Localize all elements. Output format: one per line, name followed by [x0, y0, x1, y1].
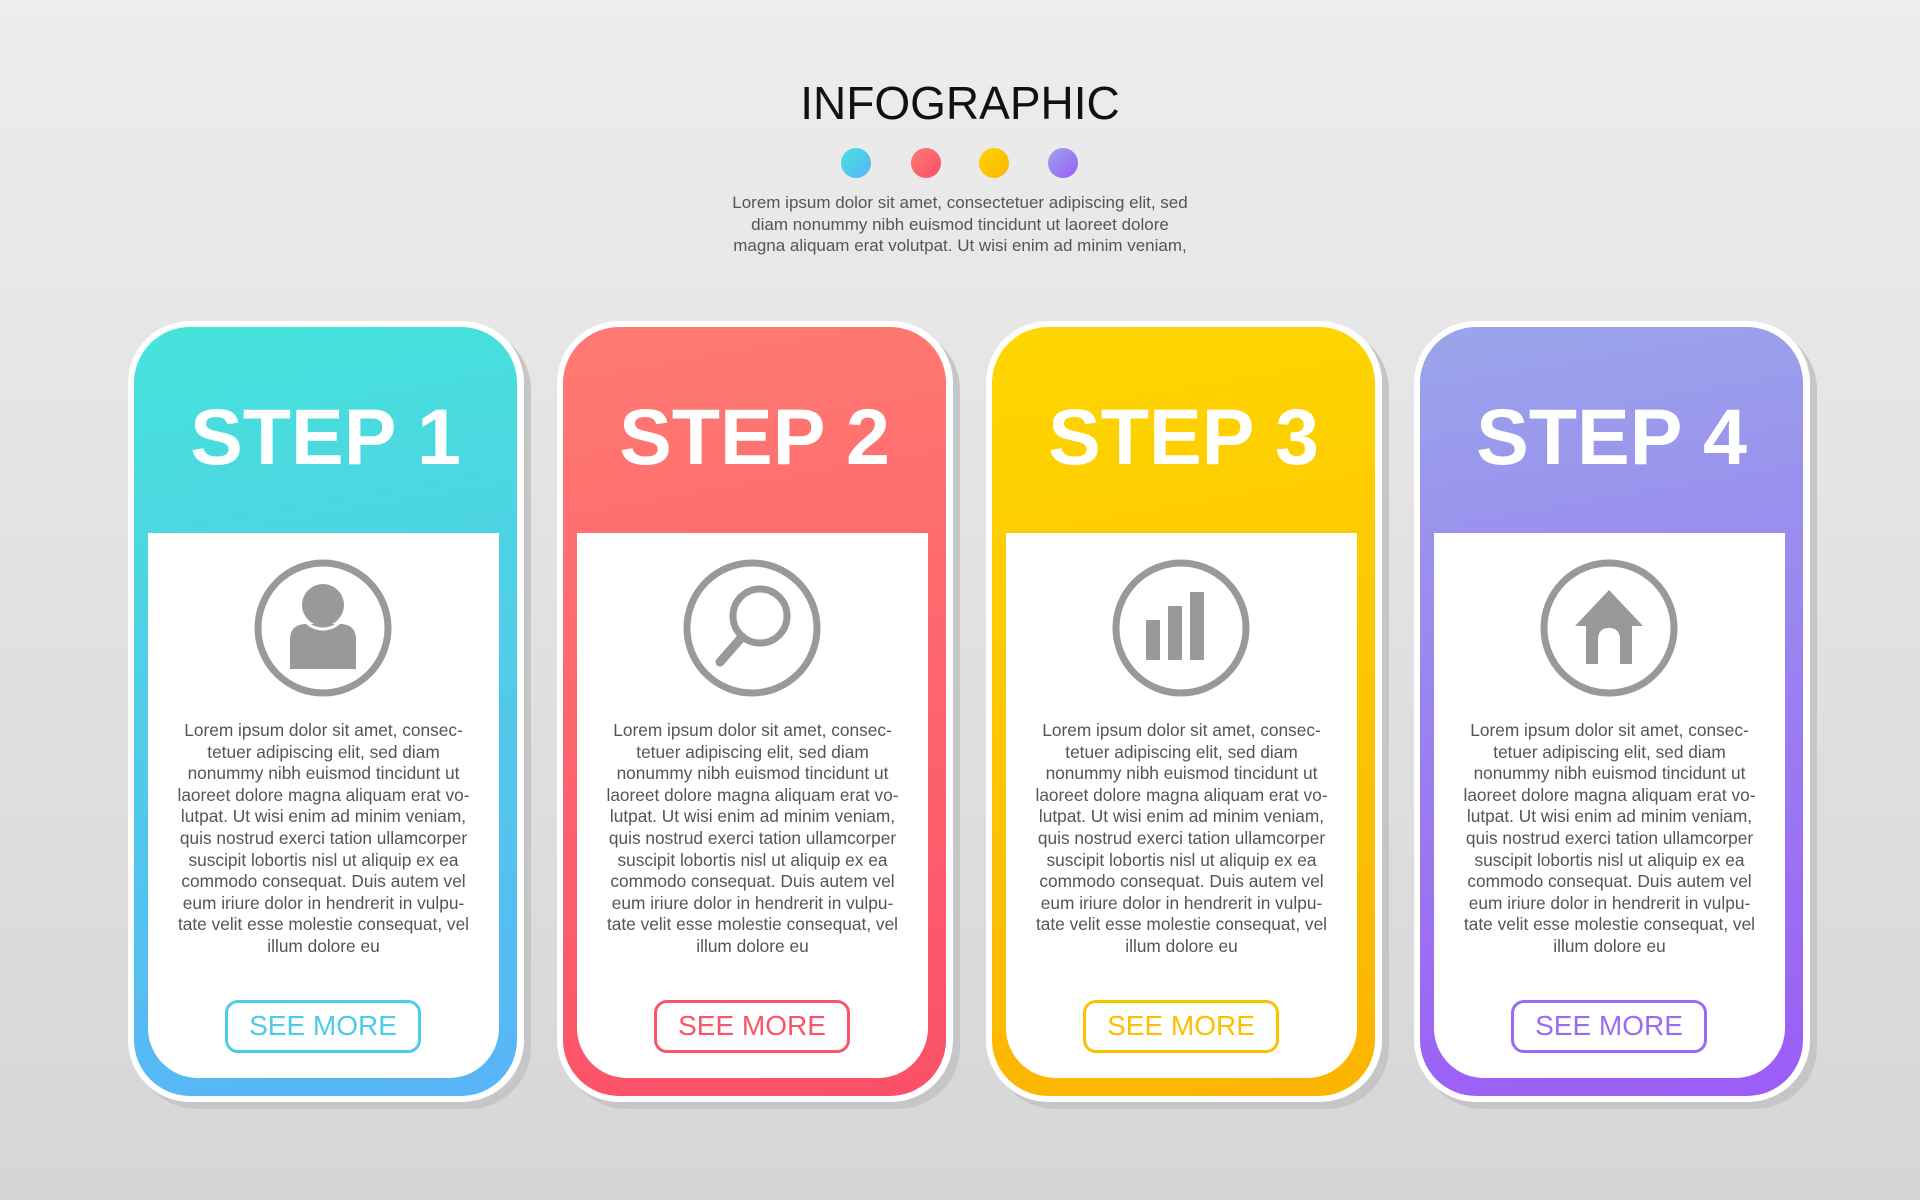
- panel: step 4: [1414, 321, 1810, 1102]
- text block: laoreet dolore magna aliquam erat vo-: [1463, 785, 1756, 805]
- button: SEE MORE: [678, 1010, 826, 1041]
- color dots: [841, 148, 1078, 178]
- text block: nonummy nibh euismod tincidunt ut: [1046, 763, 1317, 783]
- text block: eum iriure dolor in hendrerit in vulpu-: [183, 893, 464, 913]
- button: SEE MORE: [1107, 1010, 1255, 1041]
- text block: [177, 720, 470, 956]
- button: [225, 1000, 421, 1053]
- text block: eum iriure dolor in hendrerit in vulpu-: [612, 893, 893, 913]
- icon: bar chart: [1112, 560, 1250, 696]
- text block: [1463, 720, 1756, 956]
- heading: step 3: STEP 3: [1048, 392, 1319, 481]
- heading: step 4: STEP 4: [1476, 392, 1747, 481]
- text block: tetuer adipiscing elit, sed diam: [1065, 742, 1298, 762]
- text block: tetuer adipiscing elit, sed diam: [207, 742, 440, 762]
- text block: illum dolore eu: [1553, 936, 1666, 956]
- text block: nonummy nibh euismod tincidunt ut: [617, 763, 888, 783]
- text block: quis nostrud exerci tation ullamcorper: [1038, 828, 1325, 848]
- text block: eum iriure dolor in hendrerit in vulpu-: [1469, 893, 1750, 913]
- text block: Lorem ipsum dolor sit amet, consec-: [184, 720, 463, 740]
- description: [732, 193, 1188, 255]
- text block: suscipit lobortis nisl ut aliquip ex ea: [618, 850, 887, 870]
- heading: step 1: STEP 1: [190, 392, 461, 481]
- text block: tetuer adipiscing elit, sed diam: [1493, 742, 1726, 762]
- icon: magnifier: [684, 560, 820, 696]
- text block: commodo consequat. Duis autem vel: [181, 871, 466, 891]
- text block: lutpat. Ut wisi enim ad minim veniam,: [181, 806, 466, 826]
- text block: suscipit lobortis nisl ut aliquip ex ea: [189, 850, 458, 870]
- text block: quis nostrud exerci tation ullamcorper: [1466, 828, 1753, 848]
- description: Lorem ipsum dolor sit amet, consectetuer adipiscing elit, sed: [732, 193, 1188, 212]
- text block: commodo consequat. Duis autem vel: [1467, 871, 1752, 891]
- panel: step 1: [128, 321, 524, 1102]
- text block: quis nostrud exerci tation ullamcorper: [180, 828, 467, 848]
- text block: lutpat. Ut wisi enim ad minim veniam,: [1467, 806, 1752, 826]
- text block: tate velit esse molestie consequat, vel: [1036, 914, 1327, 934]
- title: INFOGRAPHIC: [800, 77, 1120, 129]
- text block: nonummy nibh euismod tincidunt ut: [1474, 763, 1745, 783]
- text block: tetuer adipiscing elit, sed diam: [636, 742, 869, 762]
- button: [1511, 1000, 1707, 1053]
- text block: nonummy nibh euismod tincidunt ut: [188, 763, 459, 783]
- text block: [606, 720, 899, 956]
- text block: eum iriure dolor in hendrerit in vulpu-: [1041, 893, 1322, 913]
- text block: quis nostrud exerci tation ullamcorper: [609, 828, 896, 848]
- text block: Lorem ipsum dolor sit amet, consec-: [613, 720, 892, 740]
- text block: tate velit esse molestie consequat, vel: [1464, 914, 1755, 934]
- text block: tate velit esse molestie consequat, vel: [178, 914, 469, 934]
- text block: laoreet dolore magna aliquam erat vo-: [177, 785, 470, 805]
- text block: suscipit lobortis nisl ut aliquip ex ea: [1475, 850, 1744, 870]
- text block: suscipit lobortis nisl ut aliquip ex ea: [1047, 850, 1316, 870]
- button: [654, 1000, 850, 1053]
- text block: illum dolore eu: [696, 936, 809, 956]
- text block: illum dolore eu: [267, 936, 380, 956]
- text block: commodo consequat. Duis autem vel: [1039, 871, 1324, 891]
- icon: user: [254, 560, 392, 696]
- button: SEE MORE: [1535, 1010, 1683, 1041]
- text block: Lorem ipsum dolor sit amet, consec-: [1042, 720, 1321, 740]
- panel: step 3: [986, 321, 1382, 1102]
- icon: house: [1540, 560, 1678, 696]
- text block: Lorem ipsum dolor sit amet, consec-: [1470, 720, 1749, 740]
- button: SEE MORE: [249, 1010, 397, 1041]
- text block: laoreet dolore magna aliquam erat vo-: [606, 785, 899, 805]
- text block: lutpat. Ut wisi enim ad minim veniam,: [610, 806, 895, 826]
- panel: step 2: [557, 321, 953, 1102]
- description: diam nonummy nibh euismod tincidunt ut laoreet dolore: [751, 214, 1169, 234]
- heading: step 2: STEP 2: [619, 392, 890, 481]
- description: magna aliquam erat volutpat. Ut wisi enim ad minim veniam,: [733, 236, 1187, 255]
- text block: [1035, 720, 1328, 956]
- text block: commodo consequat. Duis autem vel: [610, 871, 895, 891]
- text block: illum dolore eu: [1125, 936, 1238, 956]
- button: [1083, 1000, 1279, 1053]
- text block: tate velit esse molestie consequat, vel: [607, 914, 898, 934]
- text block: laoreet dolore magna aliquam erat vo-: [1035, 785, 1328, 805]
- text block: lutpat. Ut wisi enim ad minim veniam,: [1039, 806, 1324, 826]
